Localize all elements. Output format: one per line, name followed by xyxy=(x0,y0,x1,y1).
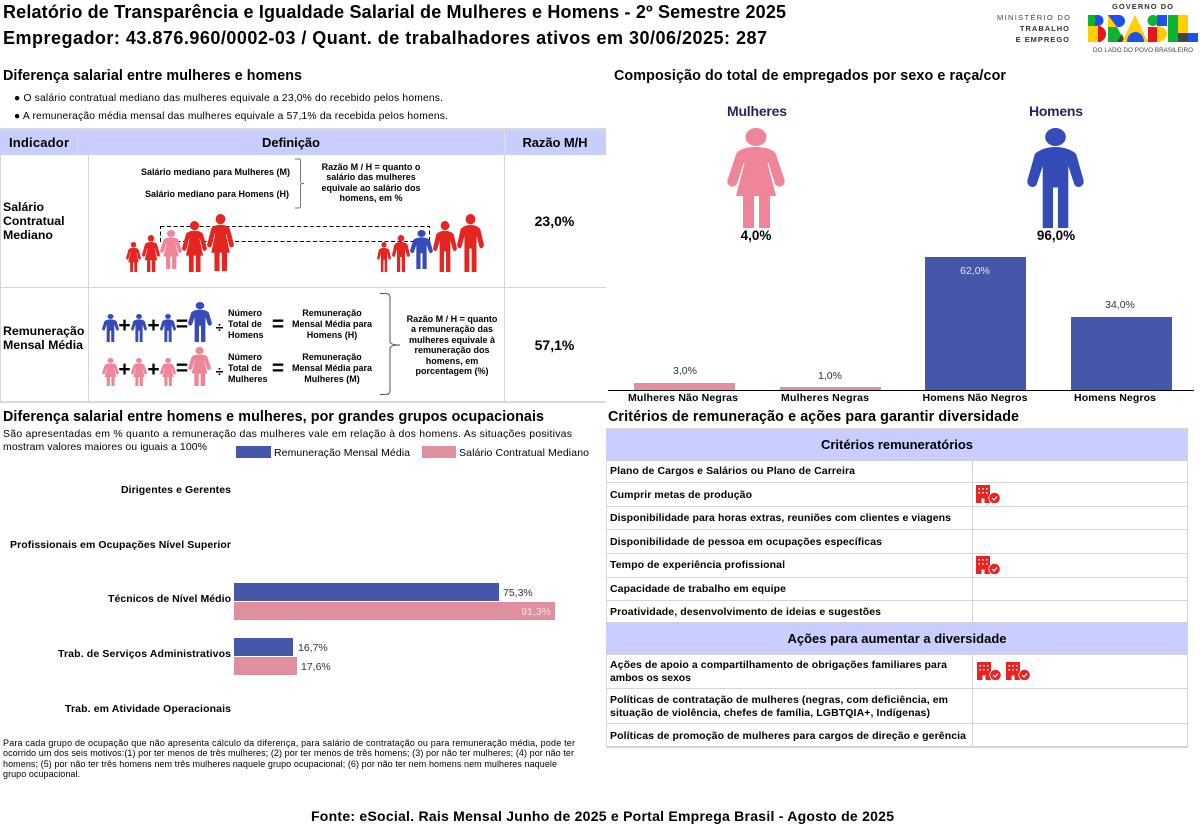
definition text: razão: equivale ao salário dos xyxy=(321,183,421,193)
bar chart: grupos ocupacionais xyxy=(10,484,555,715)
text: número total: Número xyxy=(228,308,263,318)
logo: Ministério do Trabalho e Emprego: MINISTÉRIO DO xyxy=(997,13,1070,22)
list: critérios: Proatividade, desenvolvimento de ideias e sugestões xyxy=(610,606,881,618)
list: critérios: Capacidade de trabalho em equipe xyxy=(610,583,786,595)
text: remuneração mensal média: Mensal Média para xyxy=(292,363,373,373)
definition text: razão remuneração: porcentagem (%) xyxy=(415,366,489,376)
text block: explicação xyxy=(3,428,572,453)
text: número total xyxy=(228,308,268,384)
bar chart: grupos ocupacionais: 17,6% xyxy=(301,661,331,673)
formula: homens: + xyxy=(118,314,131,337)
title: Empregador: 43.876.960/0002-03 / Quant. de trabalhadores ativos em 30/06/2025: 287 xyxy=(3,28,767,48)
pictogram: mulheres: 4,0% xyxy=(741,228,771,243)
definition text: salário mediano xyxy=(141,167,290,199)
logo: Ministério do Trabalho e Emprego: E EMPREGO xyxy=(1016,35,1070,44)
text block: bullets: ● A remuneração média mensal das mulheres equivale a 57,1% da recebida pelos homens. xyxy=(14,111,448,122)
bar chart: grupos ocupacionais: Trab. de Serviços Administrativos xyxy=(58,648,231,660)
definition text: razão remuneração: mulheres equivale à xyxy=(409,335,496,345)
bar chart: grupos ocupacionais: Técnicos de Nível Médio xyxy=(108,593,231,605)
icon: empresa com check xyxy=(976,556,1000,575)
heading: diferença salarial: Diferença salarial entre mulheres e homens xyxy=(3,68,302,84)
list: critérios: Plano de Cargos e Salários ou Plano de Carreira xyxy=(610,465,855,477)
list: ações: Ações de apoio a compartilhamento de obrigações familiares para xyxy=(610,659,947,671)
formula: homens xyxy=(102,302,284,342)
icon: empresa com check xyxy=(977,662,1002,681)
title xyxy=(3,2,786,48)
bar chart: composição por sexo e raça/cor: Homens Não Negros xyxy=(922,392,1028,404)
row label: salário contratual mediano: Mediano xyxy=(3,228,53,242)
list: critérios xyxy=(610,465,951,618)
text: número total: Homens xyxy=(228,330,264,340)
list: ações xyxy=(610,659,966,742)
bar chart: composição por sexo e raça/cor: 34,0% xyxy=(1105,299,1135,311)
pictogram: mulheres xyxy=(727,103,787,243)
bar chart: composição por sexo e raça/cor: 3,0% xyxy=(673,365,697,377)
row label: salário contratual mediano: Contratual xyxy=(3,214,64,228)
text block: nota de rodapé: Para cada grupo de ocupação que não apresenta cálculo da diferença, para salário de contratação ou para remuneração média, pode ter xyxy=(3,738,575,748)
formula: mulheres: = xyxy=(176,357,188,380)
bar chart: composição por sexo e raça/cor: Mulheres Não Negras xyxy=(628,392,738,404)
list: ações: Políticas de promoção de mulheres para cargos de direção e gerência xyxy=(610,730,966,742)
row label: remuneração mensal média: Remuneração xyxy=(3,324,85,338)
bracket xyxy=(295,159,304,208)
list: critérios: Disponibilidade de pessoa em ocupações específicas xyxy=(610,536,882,548)
list: ações: ambos os sexos xyxy=(610,672,691,684)
definition text: razão remuneração: a remuneração das xyxy=(411,324,493,334)
logo: Governo do Brasil: DO LADO DO POVO BRASILEIRO xyxy=(1093,47,1193,54)
value: 57,1%: 57,1% xyxy=(535,337,575,353)
row label: salário contratual mediano xyxy=(3,200,64,242)
text: número total: Total de xyxy=(228,319,262,329)
definition text: razão: Razão M / H = quanto o xyxy=(322,162,421,172)
text: remuneração mensal média xyxy=(292,308,373,384)
formula: mulheres xyxy=(102,347,284,386)
list: critérios: Disponibilidade para horas extras, reuniões com clientes e viagens xyxy=(610,512,951,524)
bar chart: composição por sexo e raça/cor: 62,0% xyxy=(960,265,990,277)
heading: composição: Composição do total de empregados por sexo e raça/cor xyxy=(614,68,1006,84)
formula: homens: + xyxy=(147,314,160,337)
pictogram: mulheres: Mulheres xyxy=(727,103,787,119)
definition text: razão: homens, em % xyxy=(339,193,403,203)
text: remuneração mensal média: Mensal Média para xyxy=(292,319,373,329)
definition text: razão remuneração: Razão M / H = quanto xyxy=(407,314,498,324)
bar chart: composição por sexo e raça/cor: 1,0% xyxy=(818,370,842,382)
bar chart: composição por sexo e raça/cor xyxy=(608,257,1194,404)
icon: empresa com check xyxy=(976,485,1000,504)
row label: remuneração mensal média xyxy=(3,324,85,352)
text: número total: Número xyxy=(228,352,263,362)
title: Relatório de Transparência e Igualdade Salarial de Mulheres e Homens - 2º Semestre 2025 xyxy=(3,2,786,22)
definition text: salário mediano: Salário mediano para Mulheres (M) xyxy=(141,167,290,177)
row label: remuneração mensal média: Mensal Média xyxy=(3,338,83,352)
definition text: razão: salário das mulheres xyxy=(326,172,416,182)
definition text: salário mediano: Salário mediano para Homens (H) xyxy=(145,189,289,199)
bar chart: grupos ocupacionais: 16,7% xyxy=(298,642,328,654)
icons: mulheres em ordem salarial xyxy=(126,214,234,272)
text block: nota de rodapé: homens; (5) por não ter três homens nem três mulheres naquele grupo ocupacional; (6) por não ter nem homens nem mulheres naquele xyxy=(3,759,557,769)
formula: mulheres: + xyxy=(147,358,160,381)
logo: Governo do Brasil: GOVERNO DO xyxy=(1112,2,1173,11)
text: remuneração mensal média: Remuneração xyxy=(302,308,362,318)
table header: Razão M/H xyxy=(522,135,588,150)
text: remuneração mensal média: Mulheres (M) xyxy=(304,374,360,384)
table header: Indicador xyxy=(9,135,69,150)
logo: Ministério do Trabalho e Emprego xyxy=(997,13,1070,44)
legend xyxy=(236,446,589,459)
text block: nota de rodapé: ocorrido um dos seis motivos:(1) por ter menos de três mulheres; (2) por ter menos de três homens; (3) por não ter mulheres; (4) por não ter xyxy=(3,748,574,758)
bar chart: grupos ocupacionais: Profissionais em Ocupações Nível Superior xyxy=(10,539,231,551)
formula: mulheres: + xyxy=(118,358,131,381)
logo: Ministério do Trabalho e Emprego: TRABALHO xyxy=(1020,24,1070,33)
text: número total: Mulheres xyxy=(228,374,268,384)
text: remuneração mensal média: Remuneração xyxy=(302,352,362,362)
text block: nota de rodapé xyxy=(3,738,575,779)
panel: tabela de indicadores xyxy=(0,128,606,403)
legend: Salário Contratual Mediano xyxy=(459,447,589,459)
text: número total: Total de xyxy=(228,363,262,373)
text block: bullets: ● O salário contratual mediano das mulheres equivale a 23,0% do recebido pelos homens. xyxy=(14,93,443,104)
value: 23,0%: 23,0% xyxy=(535,213,575,229)
definition text: razão remuneração: remuneração dos xyxy=(414,345,490,355)
bar chart: composição por sexo e raça/cor: Homens Negros xyxy=(1074,392,1156,404)
row label: salário contratual mediano: Salário xyxy=(3,200,44,214)
source: Fonte: eSocial. Rais Mensal Junho de 2025 e Portal Emprega Brasil - Agosto de 2025 xyxy=(311,808,894,824)
formula: homens: = xyxy=(272,313,284,336)
formula: mulheres: ÷ xyxy=(216,363,224,379)
list: critérios: Tempo de experiência profissional xyxy=(610,559,785,571)
heading: critérios: Critérios de remuneração e ações para garantir diversidade xyxy=(608,409,1019,425)
header: ações: Ações para aumentar a diversidade xyxy=(788,631,1006,646)
table header xyxy=(9,135,588,150)
formula: homens: = xyxy=(176,313,188,336)
text block: bullets xyxy=(14,93,448,122)
formula: mulheres: = xyxy=(272,357,284,380)
bracket xyxy=(380,294,400,394)
icons: homens em ordem salarial xyxy=(377,214,484,272)
list: ações: situação de violência, chefes de família, LGBTQIA+, Indígenas) xyxy=(610,707,930,719)
bar chart: grupos ocupacionais: 91,3% xyxy=(521,606,551,618)
legend: Remuneração Mensal Média xyxy=(274,447,410,459)
definition text: razão xyxy=(321,162,421,203)
formula: homens: ÷ xyxy=(216,319,224,335)
header: critérios remuneratórios: Critérios remuneratórios xyxy=(821,437,973,452)
text block: explicação: mostram valores maiores ou iguais a 100% xyxy=(3,441,207,453)
bar chart: composição por sexo e raça/cor: Mulheres Negras xyxy=(781,392,869,404)
definition text: razão remuneração: homens, em xyxy=(426,356,478,366)
bar chart: grupos ocupacionais: Trab. em Atividade Operacionais xyxy=(65,703,231,715)
heading: grupos ocupacionais: Diferença salarial entre homens e mulheres, por grandes grupos ocupacionais xyxy=(3,409,544,425)
bar chart: grupos ocupacionais: 75,3% xyxy=(503,587,533,599)
logo: Governo do Brasil xyxy=(1088,2,1198,54)
pictogram: homens: Homens xyxy=(1029,103,1083,119)
list: critérios: Cumprir metas de produção xyxy=(610,489,752,501)
text block: nota de rodapé: grupo ocupacional. xyxy=(3,769,80,779)
pictogram: homens: 96,0% xyxy=(1037,228,1075,243)
bar chart: grupos ocupacionais: Dirigentes e Gerentes xyxy=(121,484,231,496)
dashed median box xyxy=(160,226,430,242)
text block: explicação: São apresentadas em % quanto a remuneração das mulheres vale em relação à dos homens. As situações positivas xyxy=(3,428,572,440)
definition text: razão remuneração xyxy=(407,314,498,376)
icon: empresa com check xyxy=(1006,662,1030,681)
panel: critérios e ações xyxy=(606,428,1188,748)
text: remuneração mensal média: Homens (H) xyxy=(307,330,357,340)
pictogram: homens xyxy=(1027,103,1084,243)
list: ações: Políticas de contratação de mulheres (negras, com deficiência, em xyxy=(610,694,948,706)
table header: Definição xyxy=(262,135,320,150)
